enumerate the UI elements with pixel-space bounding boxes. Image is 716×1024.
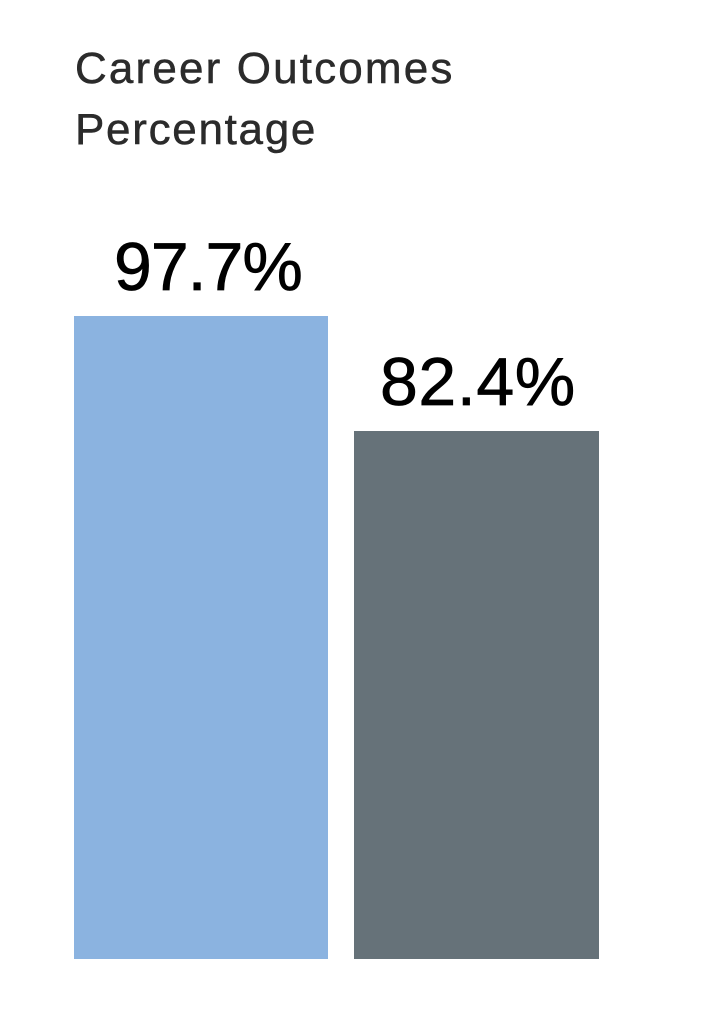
value label: 82.4%: 82.4% (380, 344, 576, 420)
bar chart (74, 229, 599, 959)
title: Percentage (75, 105, 317, 154)
title (75, 44, 454, 154)
bar: 82.4% (354, 431, 598, 958)
title: Career Outcomes (75, 44, 454, 93)
bar: 97.7% (74, 316, 328, 958)
value label: 97.7%: 97.7% (114, 229, 302, 305)
